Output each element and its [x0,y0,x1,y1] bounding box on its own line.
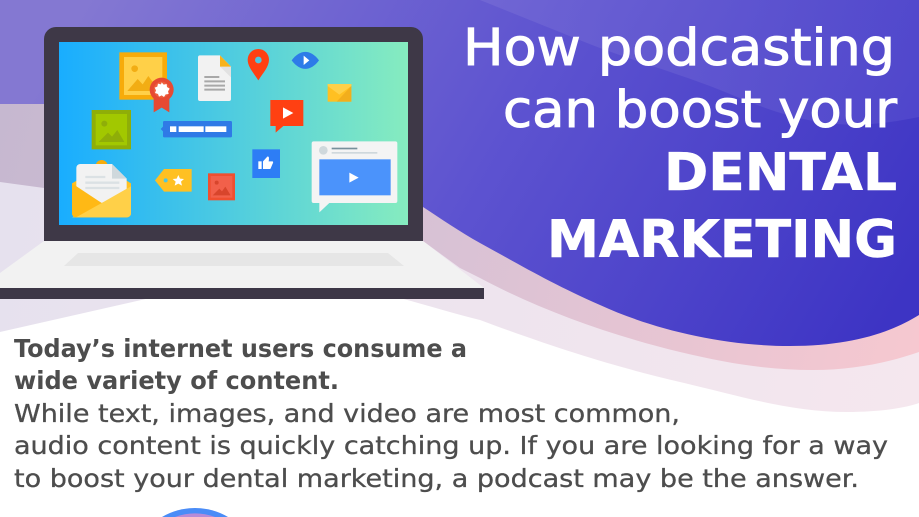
lighter sheen [480,0,919,125]
intro text [14,334,888,493]
icon: video bubble [270,100,303,133]
body line 2: audio content is quickly catching up. If you are looking for a way [14,431,888,460]
icon: green picture [92,110,131,149]
title [463,19,897,270]
title line 4: MARKETING [547,210,897,270]
icon: map pin [248,49,269,80]
background waves [0,0,919,412]
icon: price tag [155,169,192,192]
icon: thumbs up [252,149,280,178]
title line 1: How podcasting [463,19,895,78]
icon: small envelope [328,84,351,102]
icon: award badge [150,78,174,112]
title line 3: DENTAL [664,143,897,203]
icon: eye [292,52,319,69]
body line 3: to boost your dental marketing, a podcast may be the answer. [14,464,859,493]
laptop base [0,241,484,290]
partial circle icon at bottom [162,508,228,517]
laptop [0,27,484,299]
laptop screen [59,42,408,225]
icon: yellow picture [119,52,167,100]
icon: document [198,55,231,101]
body line 1: While text, images, and video are most common, [14,399,680,428]
icon: open envelope [72,160,131,217]
icon: video post card [312,141,397,212]
screen icons [72,49,397,217]
purple wave [0,0,919,346]
laptop lid [44,27,423,241]
icon: red picture [208,173,235,200]
icon: blue bar [161,121,232,137]
bold lead line 2: wide variety of content. [14,366,339,395]
bold lead line 1: Today’s internet users consume a [14,334,467,363]
pale wave [0,170,919,412]
trackpad [64,253,404,266]
mauve wave [0,104,919,370]
laptop front edge [0,288,484,299]
title line 2: can boost your [503,81,897,140]
